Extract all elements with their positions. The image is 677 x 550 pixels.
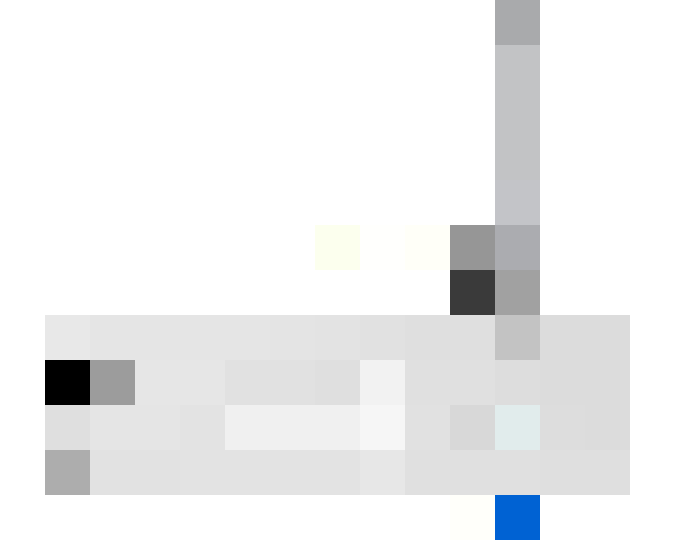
band row 4: [45, 450, 630, 495]
dark blocks: [450, 225, 495, 315]
band row 2: [45, 360, 630, 405]
vertical column of gray blocks: [495, 0, 540, 315]
pale tinted blocks: [315, 225, 450, 270]
band row 3: [45, 405, 630, 450]
blue block: [495, 495, 540, 540]
pale block under band: [450, 495, 495, 540]
panel: horizontal gray band: [45, 315, 630, 495]
band row 1: [45, 315, 630, 360]
